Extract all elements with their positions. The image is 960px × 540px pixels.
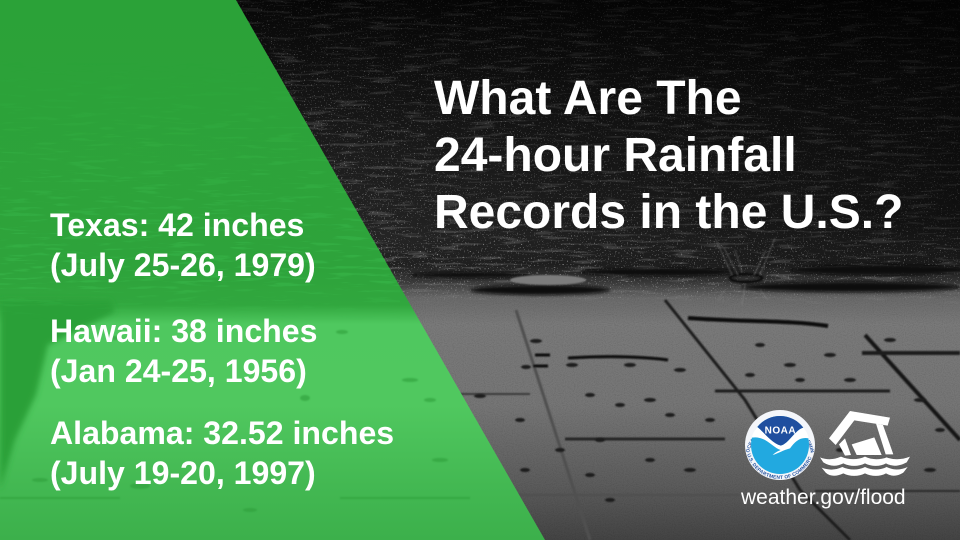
title: 24-hour Rainfall <box>434 129 797 182</box>
icon: NOAA logo: U.S. DEPARTMENT OF COMMERCE <box>748 453 812 479</box>
record: Alabama <box>50 415 394 491</box>
icon: NOAA logo: NOAA <box>765 426 796 437</box>
background: rainy pavement photo <box>236 0 960 540</box>
record: Texas: Texas: 42 inches <box>50 207 304 243</box>
record: Texas: (July 25-26, 1979) <box>50 247 316 283</box>
title: Records in the U.S.? <box>434 186 903 239</box>
pool reflection and splash crown <box>510 238 775 305</box>
record: Hawaii <box>50 313 317 389</box>
green triangle panel <box>0 0 545 540</box>
title: What Are The <box>434 72 742 125</box>
tile joints <box>460 300 960 540</box>
record: Hawaii: (Jan 24-25, 1956) <box>50 353 307 389</box>
icon: flooded house <box>820 411 910 476</box>
record: Texas <box>50 207 316 283</box>
record: Alabama: (July 19-20, 1997) <box>50 455 316 491</box>
source url: weather.gov/flood <box>741 486 906 509</box>
title <box>434 72 903 239</box>
record: Hawaii: Hawaii: 38 inches <box>50 313 317 349</box>
record: Alabama: Alabama: 32.52 inches <box>50 415 394 451</box>
